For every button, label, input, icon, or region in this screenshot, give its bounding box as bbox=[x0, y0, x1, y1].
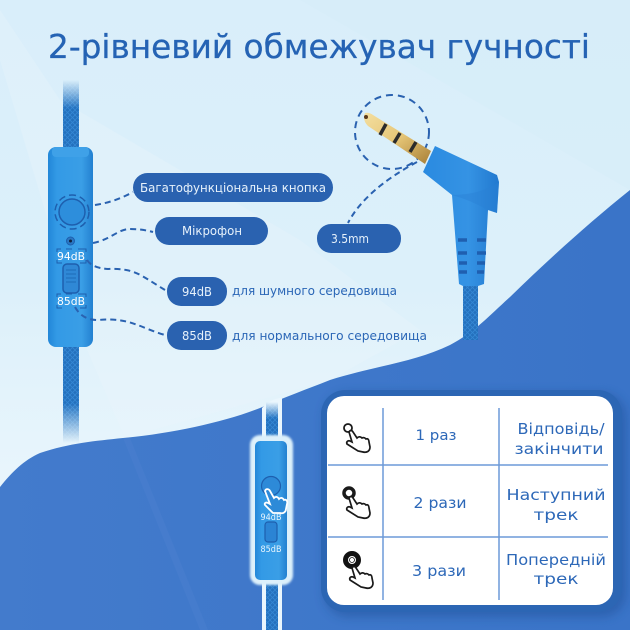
row 2 action bbox=[506, 486, 606, 524]
halo bbox=[250, 435, 293, 585]
row 1 icon bbox=[344, 424, 370, 452]
white cable strip bbox=[262, 398, 282, 630]
cable top bbox=[266, 402, 278, 437]
pill: 3.5mm bbox=[317, 224, 401, 253]
plug body bbox=[423, 146, 499, 286]
microphone hole bbox=[66, 237, 74, 245]
row 1 action: закінчити bbox=[514, 440, 604, 458]
3.5mm jack plug bbox=[355, 95, 499, 340]
text: noisy environment: для шумного середовища bbox=[232, 284, 397, 298]
pill: 3.5mm: 3.5mm bbox=[331, 232, 369, 246]
multifunction button bbox=[55, 195, 89, 229]
remote body bbox=[255, 441, 287, 580]
slider bbox=[265, 522, 277, 542]
label 94dB on remote: 94dB bbox=[57, 250, 85, 263]
lower cable bbox=[63, 345, 79, 443]
row 3 action: Попередній bbox=[506, 551, 606, 569]
row 2 count: 2 рази bbox=[414, 494, 466, 512]
row 3 count: 3 рази bbox=[412, 562, 466, 580]
row 2 action: трек bbox=[534, 506, 578, 524]
94dB: 94dB bbox=[260, 513, 282, 523]
blue wave background bbox=[0, 190, 630, 630]
upper cable bbox=[63, 80, 79, 150]
pill: multifunction button bbox=[133, 173, 333, 202]
control table panel bbox=[321, 390, 622, 612]
lower remote with white halo bbox=[250, 398, 293, 630]
row 1 action: Відповідь/ bbox=[518, 420, 606, 438]
pressing hand bbox=[265, 489, 287, 513]
row 3 icon bbox=[346, 554, 373, 588]
inline remote control bbox=[48, 147, 93, 347]
gold connector bbox=[364, 113, 431, 164]
text: normal environment: для нормального середовища bbox=[232, 329, 427, 343]
row 2 icon bbox=[344, 488, 370, 518]
title: 2-рівневий обмежувач гучності bbox=[48, 27, 590, 66]
row 3 action bbox=[506, 551, 606, 588]
jack cable bbox=[463, 284, 478, 340]
pill: 94dB bbox=[167, 277, 227, 306]
dashed circle around connector bbox=[355, 95, 429, 169]
panel shadow bbox=[324, 393, 626, 617]
button bbox=[262, 476, 280, 496]
pill: microphone bbox=[155, 217, 268, 245]
row 2 action: Наступний bbox=[506, 486, 606, 504]
pill: 94dB: 94dB bbox=[182, 285, 212, 299]
pill: 85dB bbox=[167, 321, 227, 350]
row 1 count: 1 раз bbox=[416, 428, 456, 444]
strain relief ribs bbox=[458, 240, 486, 272]
cable bottom bbox=[266, 578, 278, 630]
label 85dB on remote: 85dB bbox=[57, 295, 85, 308]
dashed leader lines bbox=[75, 162, 417, 335]
pill: microphone: Мікрофон bbox=[182, 224, 242, 238]
volume slider bbox=[63, 264, 79, 293]
pill: 85dB: 85dB bbox=[182, 329, 212, 343]
row 3 action: трек bbox=[534, 570, 578, 588]
pill: multifunction button: Багатофункціональна кнопка bbox=[140, 181, 326, 195]
row 1 action bbox=[514, 420, 606, 458]
85dB: 85dB bbox=[260, 545, 282, 555]
